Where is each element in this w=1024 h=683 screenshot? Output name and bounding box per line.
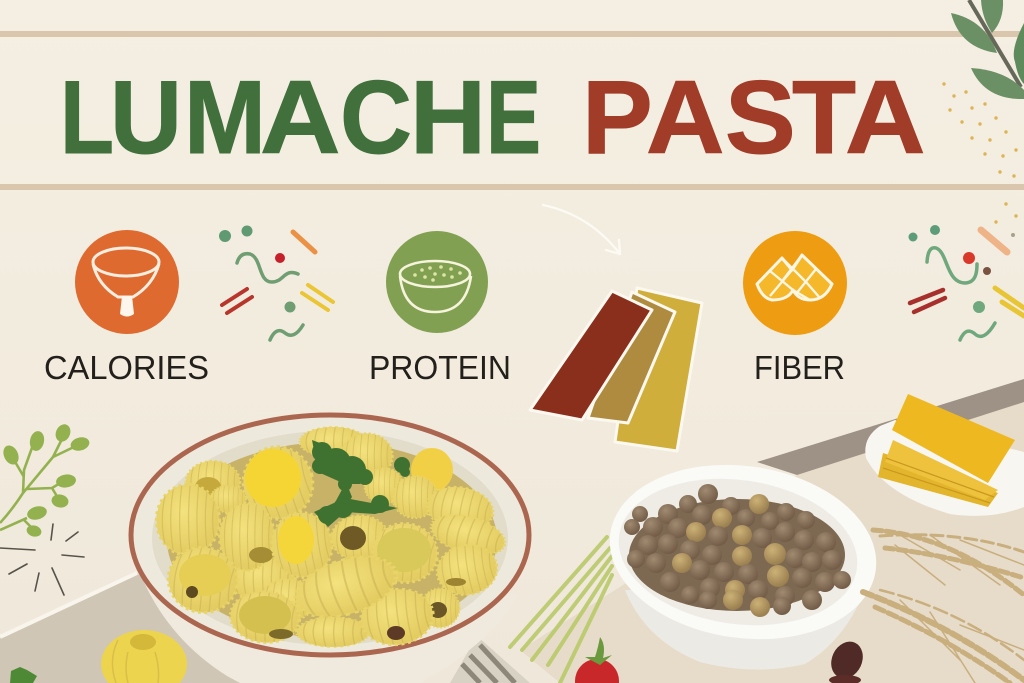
icon: calories (75, 230, 179, 334)
olive bottom (825, 636, 869, 683)
title word: Lumache: U (110, 60, 182, 176)
swatch: red (530, 291, 652, 420)
title word: Lumache: L (60, 60, 114, 176)
icon: fiber (743, 231, 847, 335)
wheat stalks (863, 530, 1024, 683)
title word: Lumache: M (184, 60, 266, 176)
small plate of yellow pasta sheets (865, 394, 1024, 516)
parsley garnish (312, 440, 410, 527)
title word: Pasta: S (725, 60, 796, 176)
label: fiber: FIBER (754, 349, 845, 386)
title word: Pasta: A (646, 60, 724, 176)
title word: Pasta: T (792, 60, 856, 176)
swatch: tan (588, 292, 675, 423)
pasta shadow (167, 442, 497, 638)
striped cloth (450, 636, 530, 683)
table surface (0, 379, 1024, 683)
burst marks (0, 524, 84, 595)
icon: protein (386, 231, 488, 333)
fiber item (743, 231, 847, 386)
confetti right (908, 225, 1024, 340)
title band rules (0, 31, 1024, 190)
herb bottom left (10, 667, 37, 683)
title word: Lumache: E (486, 60, 541, 176)
plant sprig left (0, 422, 91, 538)
title word: Lumache: H (410, 60, 486, 176)
confetti left (219, 226, 333, 340)
swatch: yellow (615, 288, 702, 451)
main bowl of lumache pasta (131, 415, 529, 683)
chickpea bowl (598, 448, 888, 670)
tomato (575, 637, 619, 683)
label: protein: PROTEIN (369, 349, 511, 386)
label: calories: CALORIES (44, 349, 209, 386)
title (60, 60, 926, 176)
title word: Pasta: A (845, 60, 926, 176)
title word: Lumache: C (340, 60, 412, 176)
protein item (369, 231, 511, 386)
title word: Pasta: P (582, 60, 653, 176)
small shell bottom left (101, 630, 187, 683)
leaf decoration top right (942, 0, 1024, 224)
chickpeas (624, 484, 851, 617)
chives (510, 537, 612, 683)
linen cloth left (0, 573, 250, 683)
arrow (543, 205, 620, 254)
calories item (44, 230, 209, 386)
lumache shells (156, 427, 509, 649)
title word: Lumache: A (260, 60, 340, 176)
grey cloth strip (757, 379, 1024, 475)
pasta swatches (530, 288, 702, 451)
wooden board (520, 400, 1024, 683)
